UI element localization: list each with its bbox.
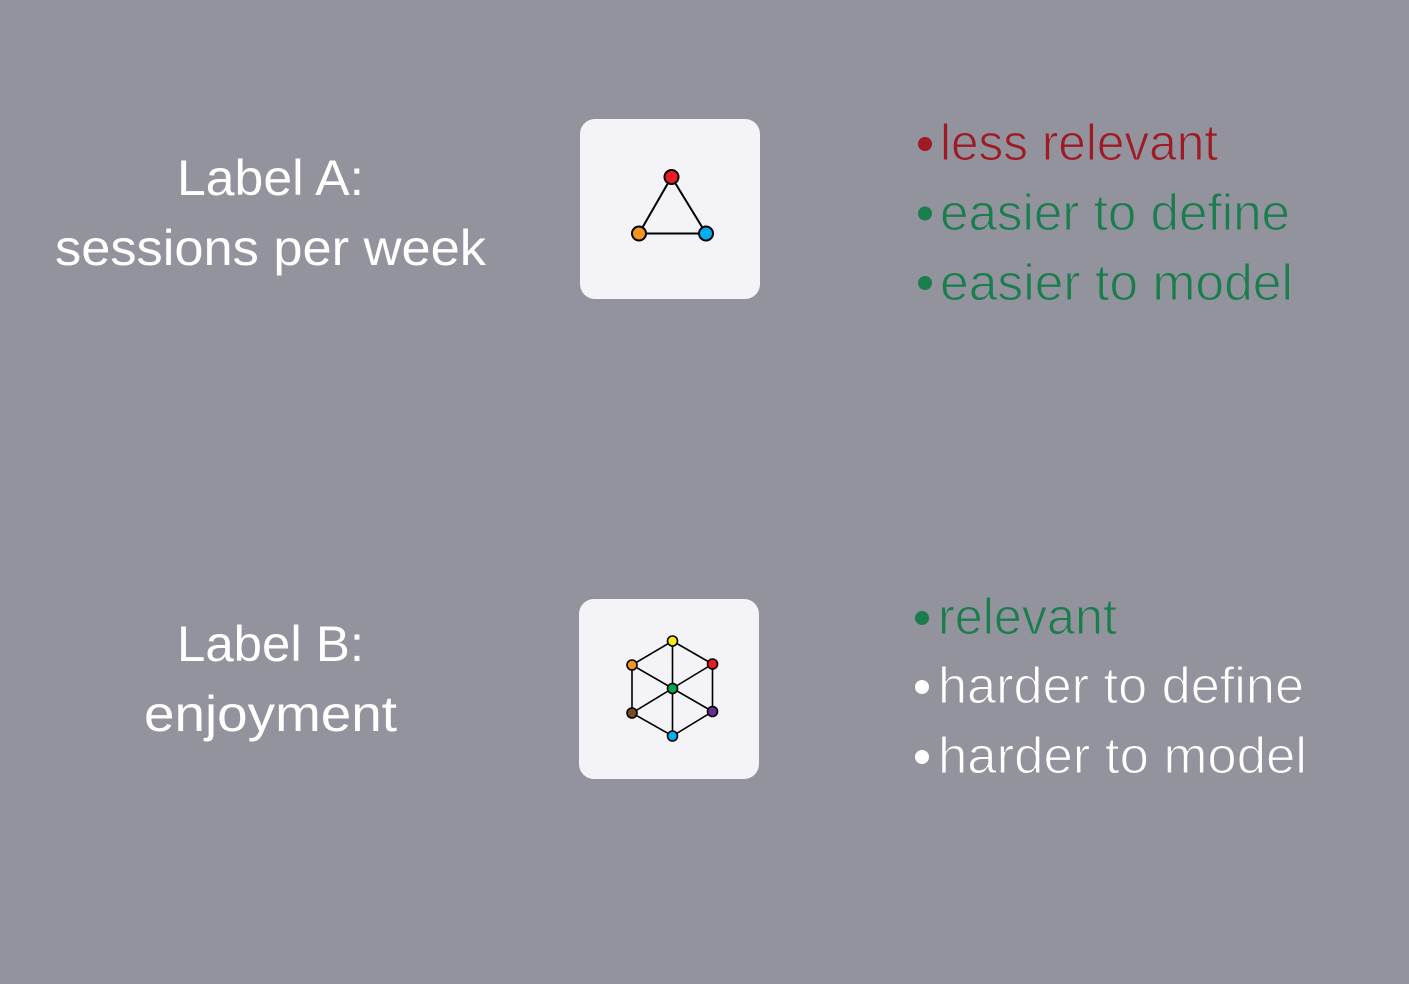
text block: label A properties: easier to model bbox=[940, 254, 1293, 311]
panel: label A heading bbox=[55, 150, 487, 276]
panel: label B heading: Label B: bbox=[177, 616, 364, 672]
panel: hexagon graph card bbox=[579, 599, 759, 779]
panel: label B heading: enjoyment bbox=[144, 686, 397, 742]
panel: label A heading: Label A: bbox=[177, 150, 364, 206]
panel: label A heading: sessions per week bbox=[55, 220, 487, 276]
text block: label B properties: harder to model bbox=[938, 727, 1307, 784]
text block: label B properties: relevant bbox=[938, 588, 1117, 645]
panel: triangle graph card bbox=[580, 119, 760, 299]
panel: label B heading bbox=[144, 616, 397, 742]
text block: label A properties: easier to define bbox=[940, 184, 1290, 241]
text block: label A properties: less relevant bbox=[940, 114, 1218, 171]
text block: label B properties bbox=[915, 588, 1307, 784]
text block: label B properties: harder to define bbox=[938, 657, 1304, 714]
text block: label A properties bbox=[918, 114, 1293, 311]
